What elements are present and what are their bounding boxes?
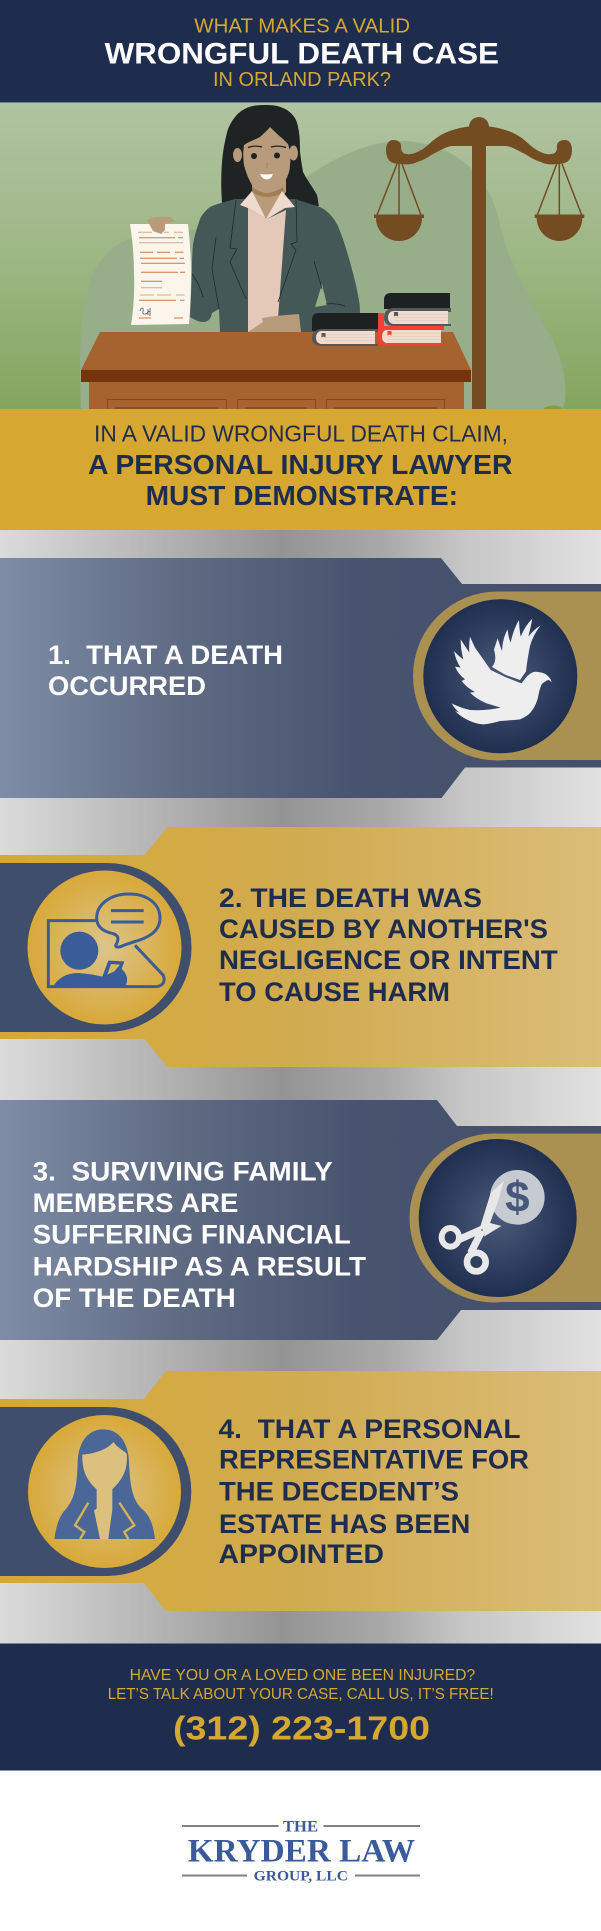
heading line 3: IN ORLAND PARK? xyxy=(213,68,391,91)
logo xyxy=(0,1770,601,1931)
heading line 2: WRONGFUL DEATH CASE xyxy=(105,38,499,71)
panel: step 2 xyxy=(0,827,601,1067)
phone number: (312) 223-1700 xyxy=(173,1709,430,1746)
subheading line 1: IN A VALID WRONGFUL DEATH CLAIM, xyxy=(94,420,508,446)
step 2 text: CAUSED BY ANOTHER'S xyxy=(219,914,548,944)
scales of justice xyxy=(374,117,584,409)
illustration: lawyer with scales of justice xyxy=(0,102,601,418)
subheading line 3: MUST DEMONSTRATE: xyxy=(146,480,458,511)
step 4 text: APPOINTED xyxy=(218,1539,384,1569)
step 4 text: THE DECEDENT’S xyxy=(219,1477,459,1507)
step 3 text: SUFFERING FINANCIAL xyxy=(33,1220,351,1250)
step 2 text xyxy=(219,883,558,1007)
logo: kryder law: KRYDER LAW xyxy=(188,1834,415,1870)
shirt xyxy=(248,208,286,332)
collar xyxy=(240,191,295,219)
step 4 text xyxy=(218,1414,529,1569)
panel: step 4 xyxy=(0,1371,601,1611)
stack of books xyxy=(312,293,451,346)
step 2 text: 2. THE DEATH WAS xyxy=(219,883,482,913)
subheading line 2: A PERSONAL INJURY LAWYER xyxy=(88,449,513,480)
panel: step 1 xyxy=(0,558,601,798)
hair xyxy=(221,105,319,206)
step 1 text: OCCURRED xyxy=(48,671,206,701)
icon: person with speech bubble xyxy=(28,870,182,1024)
heading line 1: WHAT MAKES A VALID xyxy=(194,14,410,37)
step 2 text: NEGLIGENCE OR INTENT xyxy=(219,945,558,975)
lawyer figure xyxy=(190,105,360,332)
call to action text xyxy=(108,1667,494,1703)
signed document xyxy=(130,217,191,325)
step 3 text: 3. SURVIVING FAMILY xyxy=(33,1157,333,1187)
call to action text: HAVE YOU OR A LOVED ONE BEEN INJURED? xyxy=(130,1667,475,1684)
logo: group llc: GROUP, LLC xyxy=(254,1869,348,1885)
top book xyxy=(384,293,451,326)
step 3 text: OF THE DEATH xyxy=(33,1283,236,1313)
jacket xyxy=(190,199,360,332)
call to action text: LET’S TALK ABOUT YOUR CASE, CALL US, IT’S FREE! xyxy=(108,1686,494,1703)
icon: dove xyxy=(423,599,577,753)
icon: scissors cutting a dollar coin xyxy=(419,1139,577,1297)
arm gap xyxy=(315,284,327,307)
signature xyxy=(140,308,150,316)
step 4 text: REPRESENTATIVE FOR xyxy=(219,1445,529,1475)
olive mound xyxy=(542,406,564,418)
step 1 text: 1. THAT A DEATH xyxy=(48,640,283,670)
icon: scissors cutting a dollar coin: $ xyxy=(505,1173,530,1222)
metallic background xyxy=(0,530,601,1644)
jacket lines xyxy=(192,200,345,309)
logo: the: THE xyxy=(283,1819,318,1836)
red book xyxy=(378,313,444,345)
step 4 text: 4. THAT A PERSONAL xyxy=(218,1414,520,1444)
left book xyxy=(312,313,378,346)
step 1 text xyxy=(48,640,283,701)
background blob xyxy=(80,141,566,409)
hand on desk xyxy=(248,314,301,332)
subheading band xyxy=(0,409,601,530)
step 4 text: ESTATE HAS BEEN xyxy=(219,1509,470,1539)
step 3 text: MEMBERS ARE xyxy=(33,1188,238,1218)
step 2 text: TO CAUSE HARM xyxy=(219,977,450,1007)
header banner xyxy=(0,0,601,102)
neck and face xyxy=(252,180,286,219)
icon: personal representative xyxy=(28,1415,181,1568)
desk xyxy=(81,332,471,409)
panel: step 3 xyxy=(0,1100,601,1340)
step 3 text xyxy=(33,1157,367,1313)
hand holding document xyxy=(147,217,175,234)
step 3 text: HARDSHIP AS A RESULT xyxy=(33,1252,367,1282)
footer call to action xyxy=(0,1644,601,1770)
